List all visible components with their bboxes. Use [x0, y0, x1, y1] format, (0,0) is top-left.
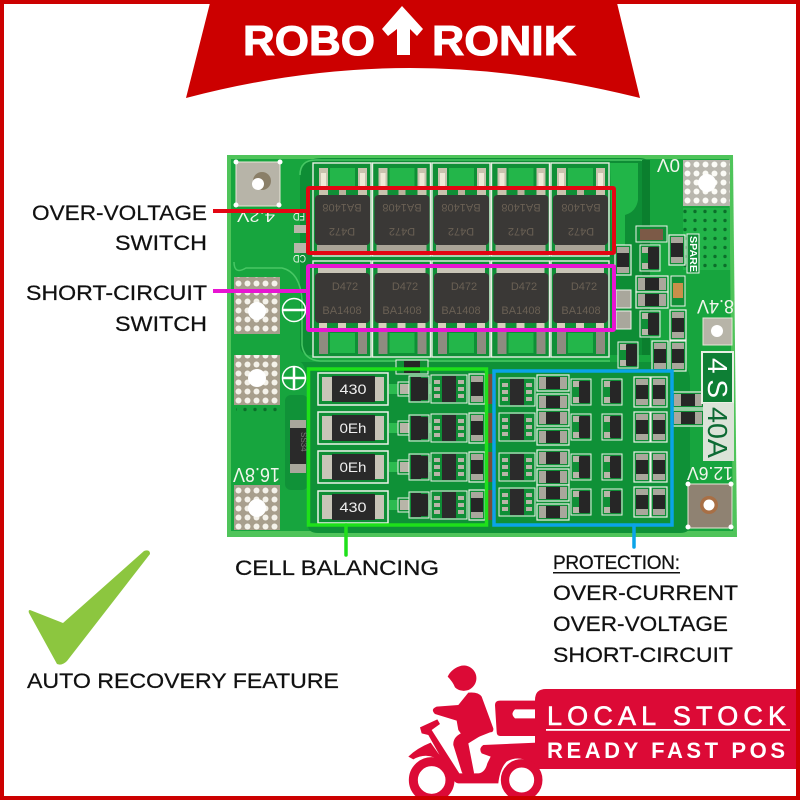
icon: delivery scooter [408, 665, 538, 798]
mosfet row: top: BA1408 [322, 201, 362, 213]
rear wheel [505, 763, 538, 797]
board model label [702, 352, 734, 461]
mosfet row: top [313, 163, 609, 256]
highlight: protection [494, 371, 672, 547]
balance resistors [318, 373, 388, 523]
diode SS34: SS34 [299, 432, 308, 452]
banner: local stock: READY FAST POS [547, 738, 785, 763]
label: cell balancing: CELL BALANCING [235, 556, 439, 580]
mosfet row: top: D472 [389, 225, 415, 237]
balance resistors: 430 [340, 381, 367, 397]
mounting pad: 12.6V [686, 482, 734, 530]
mosfet row: top: BA1408 [501, 201, 541, 213]
label: over-voltage switch: SWITCH [115, 231, 207, 255]
balance resistors: 430 [340, 499, 367, 515]
polarity symbol: plus [282, 366, 306, 390]
diode SS34 [290, 420, 308, 473]
banner: local stock [535, 689, 796, 769]
small components: right cluster [396, 226, 699, 374]
label: protection list: OVER-CURRENT [553, 581, 738, 605]
board model label: 4S [702, 358, 733, 398]
board silkscreen labels: 0V [657, 155, 680, 175]
mosfet row: bottom: D472 [392, 281, 418, 293]
icon: green check mark [29, 550, 150, 665]
mosfet row: bottom: D472 [511, 281, 537, 293]
board silkscreen labels: 12.6V [687, 463, 733, 483]
board silkscreen labels: 8.4V [697, 295, 734, 316]
mosfet row: bottom: D472 [451, 281, 477, 293]
mounting pad: bottom left [234, 485, 280, 530]
mosfet row: top: BA1408 [382, 201, 422, 213]
mosfet row: top: D472 [568, 225, 594, 237]
label: protection list: PROTECTION: [553, 553, 680, 574]
copper pour: mosfet section [300, 158, 650, 355]
label: short-circuit switch: SHORT-CIRCUIT [26, 281, 207, 305]
rider torso and arm [433, 692, 493, 742]
mounting pad: left lower [234, 355, 280, 405]
lower-left dark area [285, 395, 308, 490]
mosfet row: top: D472 [508, 225, 534, 237]
mosfet row: top: D472 [329, 225, 355, 237]
label: over-voltage switch [32, 201, 207, 255]
label: short-circuit switch [26, 281, 207, 336]
delivery box [495, 701, 537, 736]
mounting pad: left middle [234, 277, 280, 334]
copper pour: lower section [300, 362, 690, 533]
front wheel [413, 762, 450, 798]
mosfet row: top: BA1408 [561, 201, 601, 213]
label: protection list [553, 553, 738, 667]
board silkscreen labels: FD [293, 210, 305, 222]
mosfet row: top: BA1408 [441, 201, 481, 213]
board silkscreen labels: CD [293, 252, 306, 264]
board silkscreen labels: 4.2V [237, 208, 275, 225]
mosfet row: bottom: BA1408 [561, 305, 601, 317]
board model label: 40A [702, 407, 733, 458]
right trace region [610, 163, 638, 245]
logo wordmark: ROBO [243, 17, 375, 64]
logo wordmark end: RONIK [432, 17, 576, 64]
protection components [499, 375, 704, 520]
mounting pad: 8.4V [703, 318, 732, 345]
circuit board photo [227, 155, 737, 537]
header banner [186, 3, 640, 98]
rider leg [453, 730, 490, 777]
mosfet row: bottom: D472 [571, 281, 597, 293]
polarity symbol: minus [282, 298, 306, 322]
highlight: over-voltage switch [213, 188, 614, 253]
label: auto recovery feature: AUTO RECOVERY FEATURE [27, 669, 339, 693]
mosfet row: bottom: BA1408 [501, 305, 541, 317]
mosfet row: bottom: BA1408 [322, 305, 362, 317]
mosfet row: bottom: BA1408 [382, 305, 422, 317]
mosfet row: bottom [313, 261, 609, 357]
highlight: short-circuit switch [213, 266, 614, 330]
label: over-voltage switch: OVER-VOLTAGE [32, 201, 207, 225]
small components: right cluster: SPARE [687, 236, 698, 272]
board silkscreen labels [232, 155, 734, 485]
mounting pad: top left [234, 160, 282, 208]
scooter body and shield [420, 719, 537, 783]
board silkscreen labels: 16.8V [232, 463, 280, 485]
label: short-circuit switch: SWITCH [115, 312, 207, 336]
highlight: cell balancing [308, 369, 486, 555]
rider head [448, 665, 476, 691]
balance resistors: 0Eh [340, 420, 366, 436]
balance driver components [389, 374, 496, 520]
label: protection list: OVER-VOLTAGE [553, 612, 728, 636]
mounting pad: top right [683, 160, 730, 206]
mosfet row: top: D472 [448, 225, 474, 237]
front fender [408, 743, 445, 765]
banner: local stock: LOCAL STOCK [547, 701, 786, 731]
label: protection list: SHORT-CIRCUIT [553, 643, 733, 667]
balance resistors: 0Eh [340, 459, 366, 475]
mosfet row: bottom: D472 [332, 281, 358, 293]
mosfet row: bottom: BA1408 [441, 305, 481, 317]
logo arrow [382, 6, 423, 55]
